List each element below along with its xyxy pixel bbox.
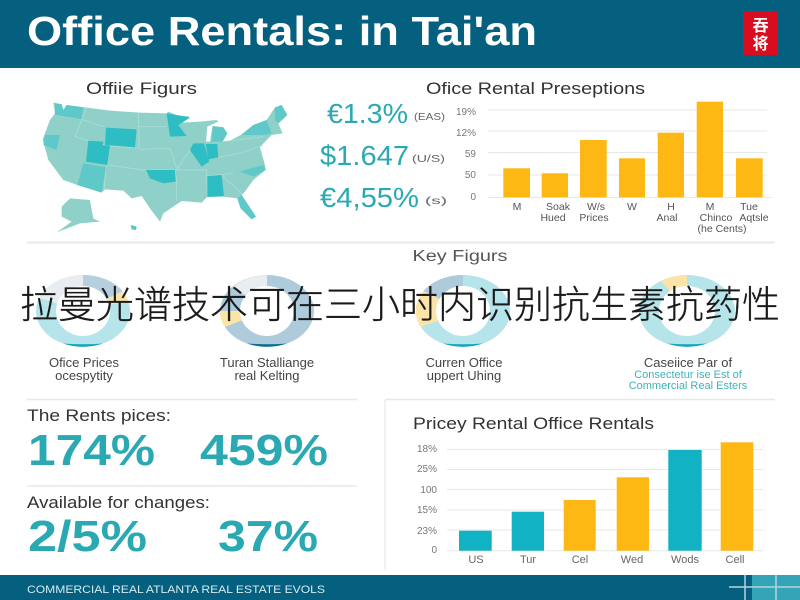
y axis labels: 12% [456, 128, 476, 139]
panel: map [43, 80, 287, 232]
category labels: (he Cents) [697, 223, 747, 235]
y axis labels: 0 [431, 545, 437, 556]
donut captions: Ofice Prices [49, 355, 120, 370]
heading: Key Figurs [412, 248, 508, 265]
panel: rent prices [27, 407, 328, 475]
y axis labels: 25% [417, 464, 437, 475]
panel: office rental stats [320, 98, 447, 213]
y axis labels: 19% [456, 107, 476, 118]
category labels: Cel [572, 554, 588, 566]
y axis labels: 100 [420, 485, 437, 496]
label: Available for changes: [27, 494, 210, 512]
y axis labels: 18% [417, 444, 437, 455]
category labels: Wed [621, 554, 643, 566]
category labels: Prices [579, 212, 609, 224]
US map [43, 102, 287, 232]
donut 3 [416, 275, 510, 347]
y axis labels: 15% [417, 505, 437, 516]
icon: red seal: 吞 [752, 18, 769, 35]
category labels: US [468, 554, 484, 566]
panel: rental bar chart [426, 80, 772, 235]
donut captions [49, 355, 748, 392]
title: Office Rentals: in Tai'an [27, 8, 537, 54]
donut captions: real Kelting [234, 368, 300, 383]
donut captions: Consectetur ise Est of [634, 369, 743, 381]
panel: pricey rental chart [413, 415, 763, 566]
header banner [0, 0, 800, 68]
category labels: Chinco [700, 212, 733, 224]
category labels: M [513, 201, 521, 213]
category labels: Aqtsle [739, 212, 769, 224]
panel: office rental stats: (s) [425, 196, 447, 207]
stat 3: €4,55% [320, 182, 419, 213]
stat 459%: 459% [200, 426, 328, 475]
icon: red seal: 将 [752, 35, 769, 53]
category labels: Tue [740, 201, 758, 213]
chart heading: Ofice Rental Preseptions [426, 80, 645, 98]
category labels: Hued [540, 212, 566, 224]
category labels: Wods [671, 554, 699, 566]
y axis labels [417, 444, 437, 556]
stat 215%: 2/5% [28, 512, 147, 561]
overlay caption: 拉曼光谱技术可在三小时内识别抗生素抗药性 [20, 274, 780, 329]
panel: office rental stats: (U/S) [412, 154, 445, 165]
donut 4 [639, 275, 735, 347]
bars [503, 102, 763, 197]
y axis labels [456, 107, 476, 203]
donut captions: Curren Office [425, 355, 503, 370]
category labels: W/s [587, 201, 605, 213]
footer decoration [729, 575, 800, 600]
donut captions: uppert Uhing [427, 368, 501, 383]
stat 1: €1.3% [327, 98, 408, 129]
donut 2 [220, 275, 314, 347]
footer banner [0, 575, 800, 600]
panel: availability [27, 494, 318, 561]
panel: key figures [36, 248, 748, 392]
footer text: COMMERCIAL REAL ATLANTA REAL ESTATE EVOLS [27, 584, 325, 596]
chart heading: Pricey Rental Office Rentals [413, 415, 654, 433]
category labels: H [667, 201, 675, 213]
donut captions: Commercial Real Esters [629, 380, 748, 392]
stat 37%: 37% [218, 512, 318, 561]
y axis labels: 0 [470, 192, 476, 203]
icon: red seal [743, 11, 778, 55]
map heading: Offiie Figurs [86, 80, 197, 98]
category labels: W [627, 201, 637, 213]
category labels: Soak [546, 201, 571, 213]
category labels: M [706, 201, 714, 213]
donut captions: Caseiice Par of [644, 355, 732, 370]
donut 1 [36, 275, 130, 347]
label: The Rents pices: [27, 407, 171, 425]
bars [459, 442, 753, 551]
category labels: Tur [520, 554, 536, 566]
y axis labels: 23% [417, 526, 437, 537]
category labels [468, 554, 744, 566]
donut captions: ocespytity [55, 368, 113, 383]
donut captions: Turan Stalliange [220, 355, 314, 370]
panel: office rental stats: (EAS) [414, 112, 445, 123]
y axis labels: 59 [465, 149, 476, 160]
stat 2: $1.647 [320, 140, 409, 171]
stat 174%: 174% [28, 426, 155, 475]
category labels: Cell [726, 554, 744, 566]
category labels: Anal [656, 212, 678, 224]
y axis labels: 50 [465, 170, 476, 181]
category labels [513, 201, 769, 235]
